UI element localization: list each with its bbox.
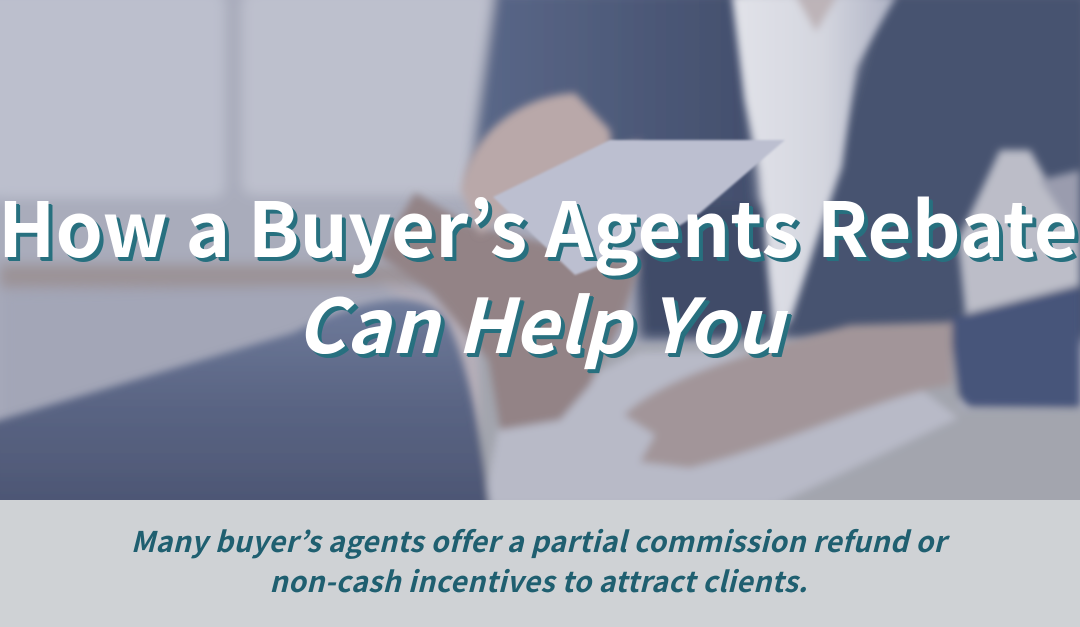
jacket right: [780, 0, 1080, 340]
icon: blank card: [493, 140, 785, 275]
subtitle text: Many buyer’s agents offer a partial commission refund or: [131, 520, 946, 561]
sofa and floor: [0, 0, 500, 275]
lower hand receiving: [378, 193, 640, 430]
shirt: [732, 0, 897, 330]
upper hand: [461, 93, 644, 235]
panel: subtitle band: [0, 500, 1080, 627]
right cuff: [958, 150, 1080, 320]
subtitle text: [131, 520, 950, 601]
jacket left: [470, 0, 770, 340]
title second line: Can Help You: [296, 266, 784, 375]
cuff light edge: [380, 280, 505, 500]
background photo: handing over a card: [0, 0, 1080, 500]
subtitle text: non-cash incentives to attract clients.: [269, 560, 808, 601]
sleeve left: [0, 300, 490, 510]
lower hand: [624, 322, 952, 468]
title: How a Buyer’s Agents Rebate: [0, 169, 1078, 279]
table and paper: [480, 330, 1080, 510]
